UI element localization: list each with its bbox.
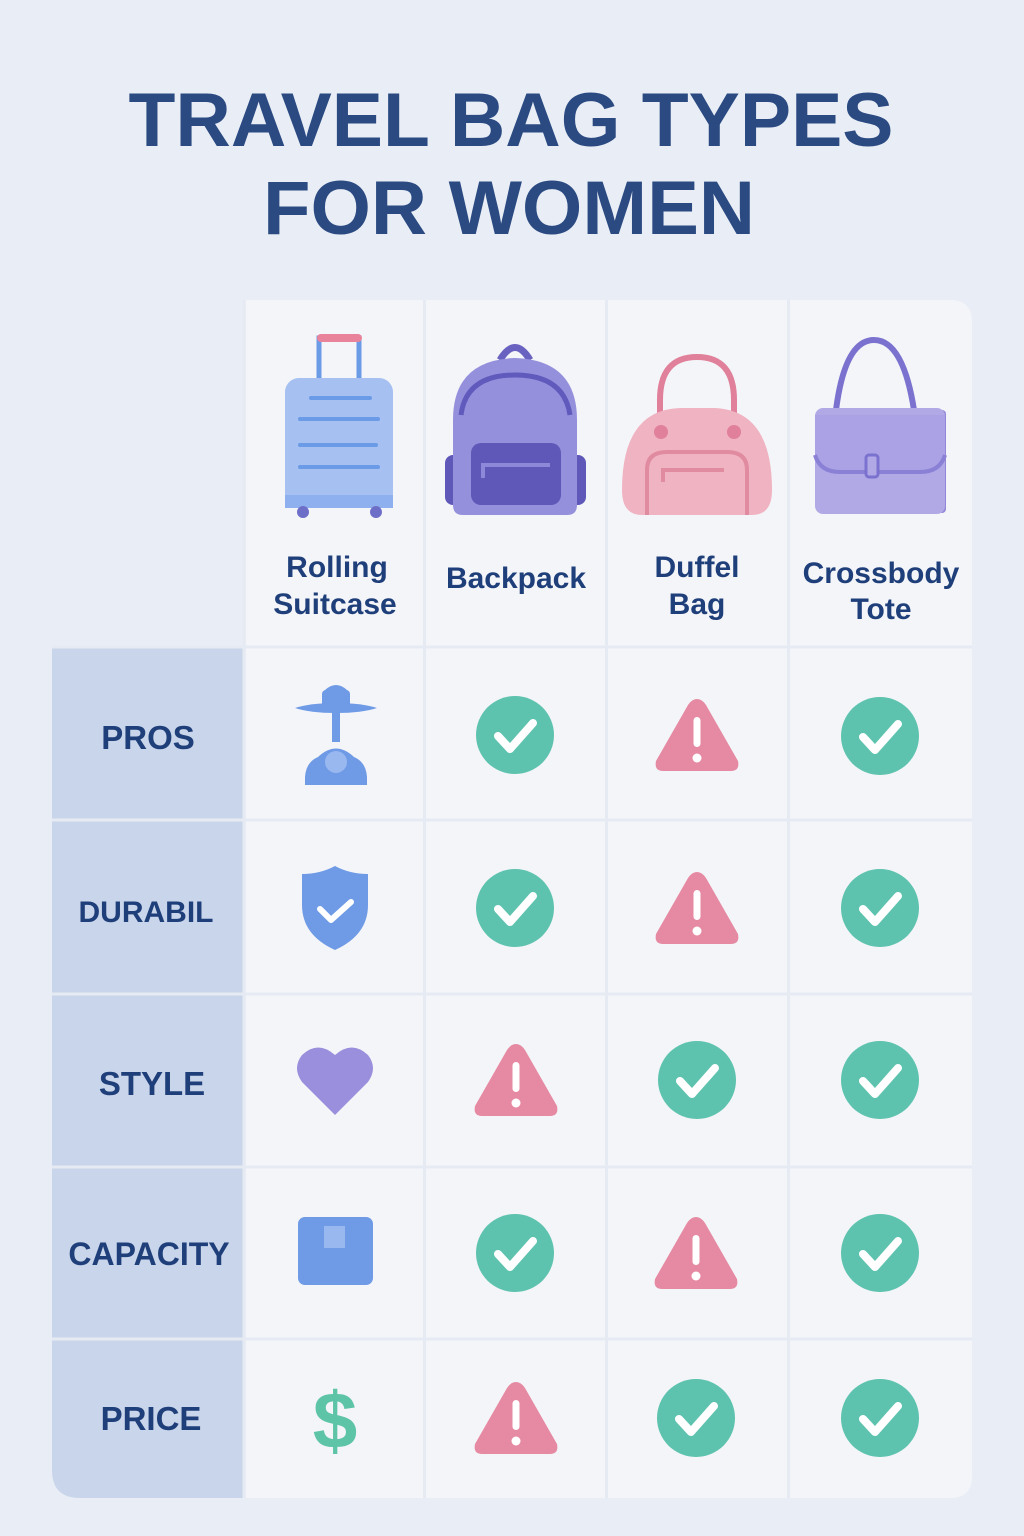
icon: shield — [302, 866, 368, 950]
row labels: STYLE — [99, 1065, 205, 1102]
title: TRAVEL BAG TYPES — [128, 78, 894, 163]
column headers: Bag — [669, 588, 725, 621]
column headers: Suitcase — [273, 588, 397, 621]
column headers: Duffel — [654, 551, 740, 584]
row labels: PROS — [101, 719, 195, 756]
icon: box — [298, 1217, 373, 1285]
icon: duffel bag — [622, 357, 772, 515]
column headers: Tote — [850, 593, 912, 626]
icon: rolling suitcase — [285, 334, 393, 518]
table panel — [52, 300, 972, 1498]
row labels: PRICE — [101, 1400, 201, 1437]
row labels: CAPACITY — [68, 1236, 230, 1272]
row labels: DURABIL — [78, 896, 214, 929]
column headers: Crossbody — [803, 557, 960, 590]
icon: scale — [295, 685, 377, 785]
status icons — [475, 696, 919, 1457]
column headers: Backpack — [446, 562, 586, 595]
icon: backpack — [445, 348, 586, 515]
title: FOR WOMEN — [263, 166, 755, 251]
column headers — [273, 551, 960, 626]
row labels — [68, 719, 230, 1437]
icon: crossbody tote — [815, 340, 946, 514]
icon: dollar: $ — [313, 1376, 357, 1465]
title — [128, 78, 894, 251]
column headers: Rolling — [286, 551, 388, 584]
icon: heart — [297, 1048, 373, 1115]
